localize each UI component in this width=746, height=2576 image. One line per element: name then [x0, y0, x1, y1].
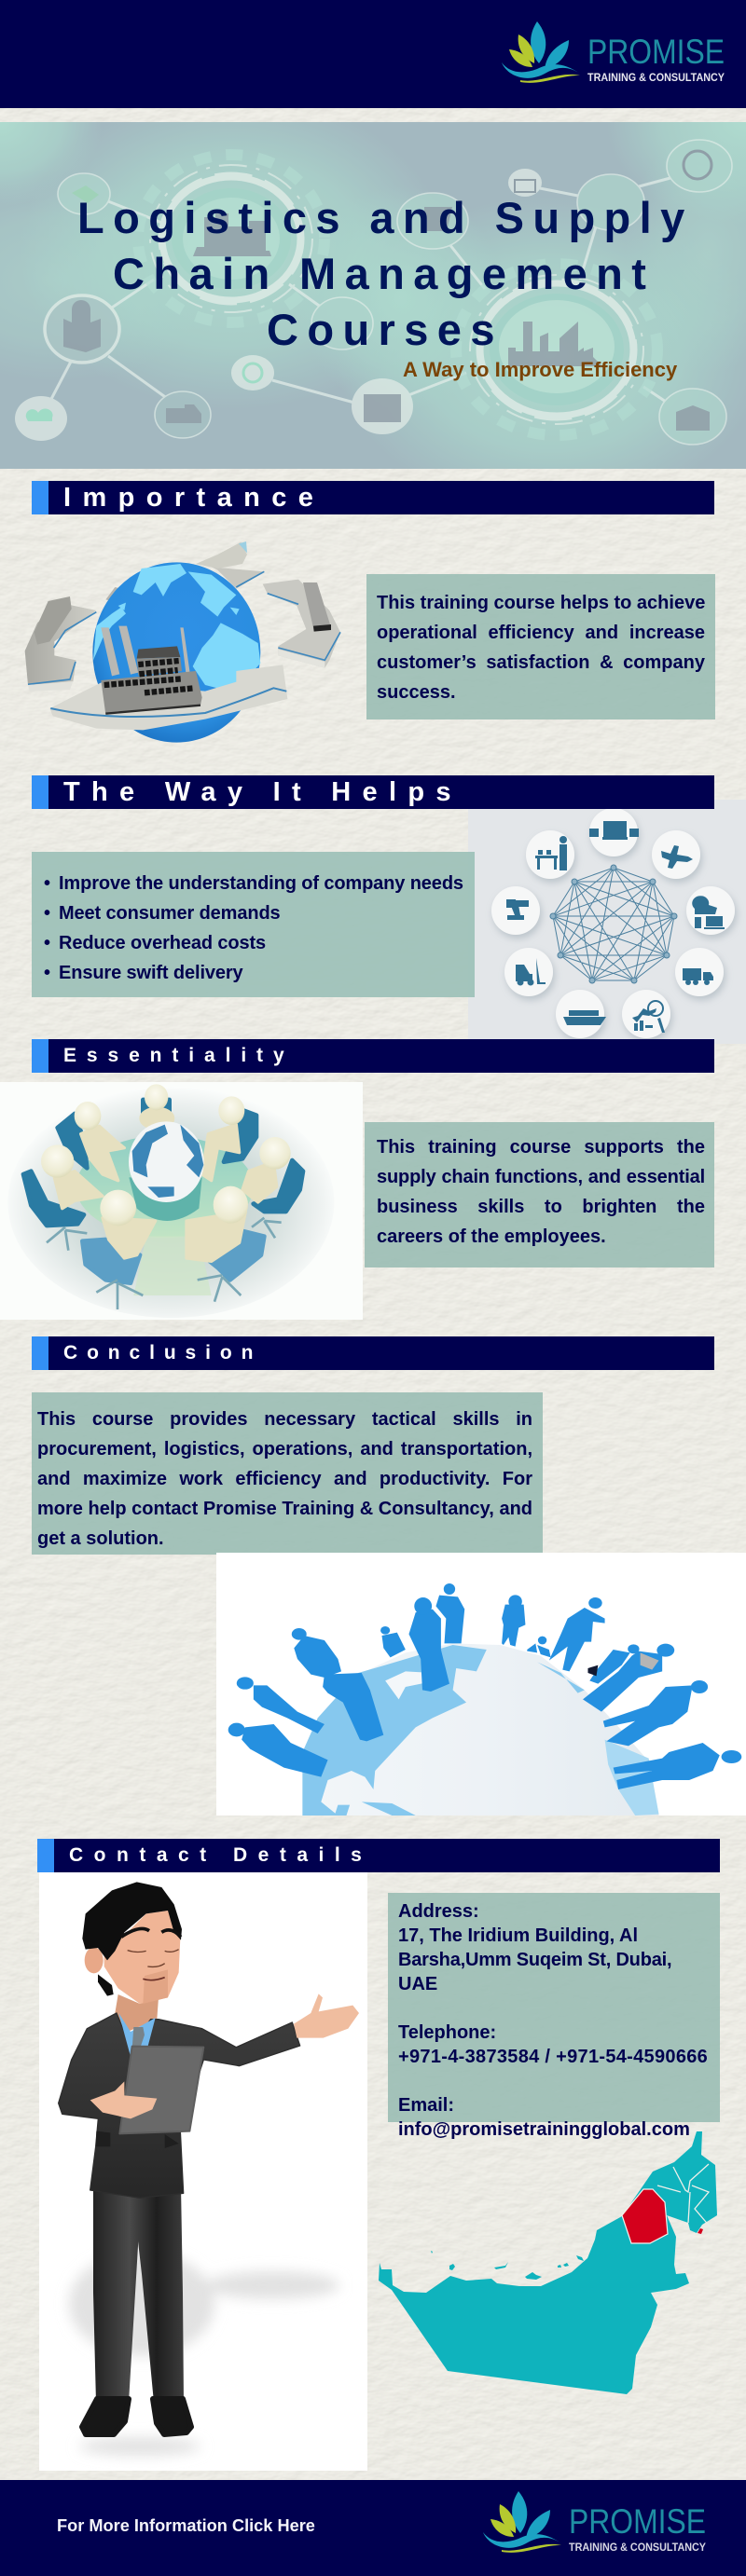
text panel: essentiality: business skills to brighten the — [377, 1197, 705, 1217]
title — [77, 193, 694, 354]
text panel: importance: operational efficiency and increase — [377, 623, 705, 643]
map of the UAE — [379, 2131, 717, 2394]
text panel: importance: success. — [377, 682, 456, 703]
contact details text: +971-4-3873584 / +971-54-4590666 — [398, 2047, 708, 2067]
bullet list: Ensure swift delivery — [59, 963, 243, 983]
section heading: Contact Details — [37, 1839, 720, 1872]
emirate borders and islands — [431, 2164, 711, 2280]
text panel: conclusion: more help contact Promise Training & Consultancy, and — [37, 1499, 532, 1519]
continents — [93, 564, 260, 688]
illustration: people standing around a globe — [216, 1553, 746, 1816]
globe — [129, 1177, 202, 1221]
jacket — [59, 2013, 300, 2198]
figures — [228, 1583, 741, 1789]
text panel background: contact — [388, 1893, 720, 2122]
left arrow with ship — [25, 596, 96, 692]
bullet list: Reduce overhead costs — [59, 933, 266, 953]
section heading: Essentiality: Essentiality — [63, 1045, 295, 1066]
shoes — [82, 2399, 191, 2434]
title: Courses — [267, 305, 504, 354]
contact details text: UAE — [398, 1974, 437, 1994]
text panel: conclusion: and maximize work efficiency and productivity. For — [37, 1469, 532, 1489]
bullet list: Improve the understanding of company needs — [59, 873, 463, 894]
table — [76, 1135, 254, 1238]
node pictograms — [63, 207, 710, 431]
globe — [302, 1643, 659, 1816]
holding hand — [90, 2081, 157, 2118]
shadow — [69, 2252, 339, 2456]
top header bar with logo — [0, 0, 746, 108]
open hand — [294, 1994, 359, 2038]
factory — [101, 626, 202, 715]
logo: Promise Training & Consultancy — [502, 21, 725, 84]
bullet list: Meet consumer demands — [59, 903, 281, 924]
chair bases — [47, 1218, 282, 1309]
section heading: Importance: Importance — [63, 483, 325, 513]
footer bar — [0, 2480, 746, 2576]
banner: logistics network background — [0, 122, 746, 469]
footer logo — [483, 2491, 706, 2554]
illustration: supply chain network wheel — [468, 800, 746, 1044]
top arrow with plane — [105, 541, 264, 601]
section heading: Conclusion: Conclusion — [63, 1342, 262, 1363]
Dubai highlight — [622, 2189, 668, 2243]
bullet list: • — [44, 903, 50, 924]
illustration: presenter with tablet — [39, 1872, 367, 2471]
text panel: conclusion: procurement, logistics, operations, and transportation, — [37, 1439, 532, 1459]
text panel: importance — [366, 574, 715, 719]
text panel: essentiality: This training course supports the — [377, 1137, 705, 1158]
contact details text: Email: — [398, 2095, 454, 2116]
text panel: conclusion: get a solution. — [37, 1528, 164, 1549]
text panel: essentiality — [365, 1122, 714, 1267]
text panel: benefit list — [32, 852, 475, 997]
right arrow with truck — [263, 580, 340, 668]
text panel: essentiality: careers of the employees. — [377, 1226, 606, 1247]
footer call to action: For More Information Click Here — [57, 2516, 315, 2535]
section heading: Conclusion — [32, 1336, 714, 1370]
contact details text: 17, The Iridium Building, Al — [398, 1925, 638, 1946]
section heading: The Way It Helps — [32, 775, 714, 809]
bullet list: • — [44, 873, 50, 894]
section heading: The Way It Helps: The Way It Helps — [63, 777, 463, 807]
mint haze — [0, 20, 746, 513]
subtitle: A Way to Improve Efficiency — [403, 358, 677, 381]
text panel: importance: customer’s satisfaction & company — [377, 652, 705, 673]
section heading: Contact Details: Contact Details — [69, 1844, 372, 1866]
wheel icons — [506, 821, 725, 1033]
tablet — [119, 2047, 203, 2133]
text panel: essentiality: supply chain functions, and essential — [377, 1167, 705, 1187]
contact details text: Telephone: — [398, 2022, 496, 2043]
back hair — [98, 1974, 114, 1996]
contact details text: Address: — [398, 1901, 479, 1922]
contact details text: info@promisetrainingglobal.com — [398, 2119, 690, 2140]
upper body — [59, 1882, 359, 2198]
bullet list — [44, 873, 463, 983]
illustration: team around a globe table — [0, 1082, 363, 1320]
text panel: importance: This training course helps to achieve — [377, 593, 705, 613]
neck — [115, 1994, 159, 2032]
shirt and tie — [118, 2013, 156, 2057]
text panel: conclusion: This course provides necessary tactical skills in — [37, 1409, 532, 1430]
title: Logistics and Supply — [77, 193, 694, 242]
section heading: Essentiality — [32, 1039, 714, 1073]
legs — [93, 2185, 184, 2403]
illustration: globe with factory and transport arrows — [24, 541, 341, 743]
bottom arrow — [49, 665, 287, 730]
network artwork — [15, 140, 732, 445]
text panel: conclusion — [32, 1392, 543, 1555]
bullet list: • — [44, 933, 50, 953]
contact details text — [398, 1901, 708, 2140]
bullet list: • — [44, 963, 50, 983]
title: Chain Management — [113, 249, 655, 298]
contact details text: Barsha,Umm Suqeim St, Dubai, — [398, 1950, 671, 1970]
head — [85, 1947, 104, 1973]
chairs — [23, 1100, 303, 1226]
section heading: Importance — [32, 481, 714, 514]
figures — [54, 1108, 277, 1261]
